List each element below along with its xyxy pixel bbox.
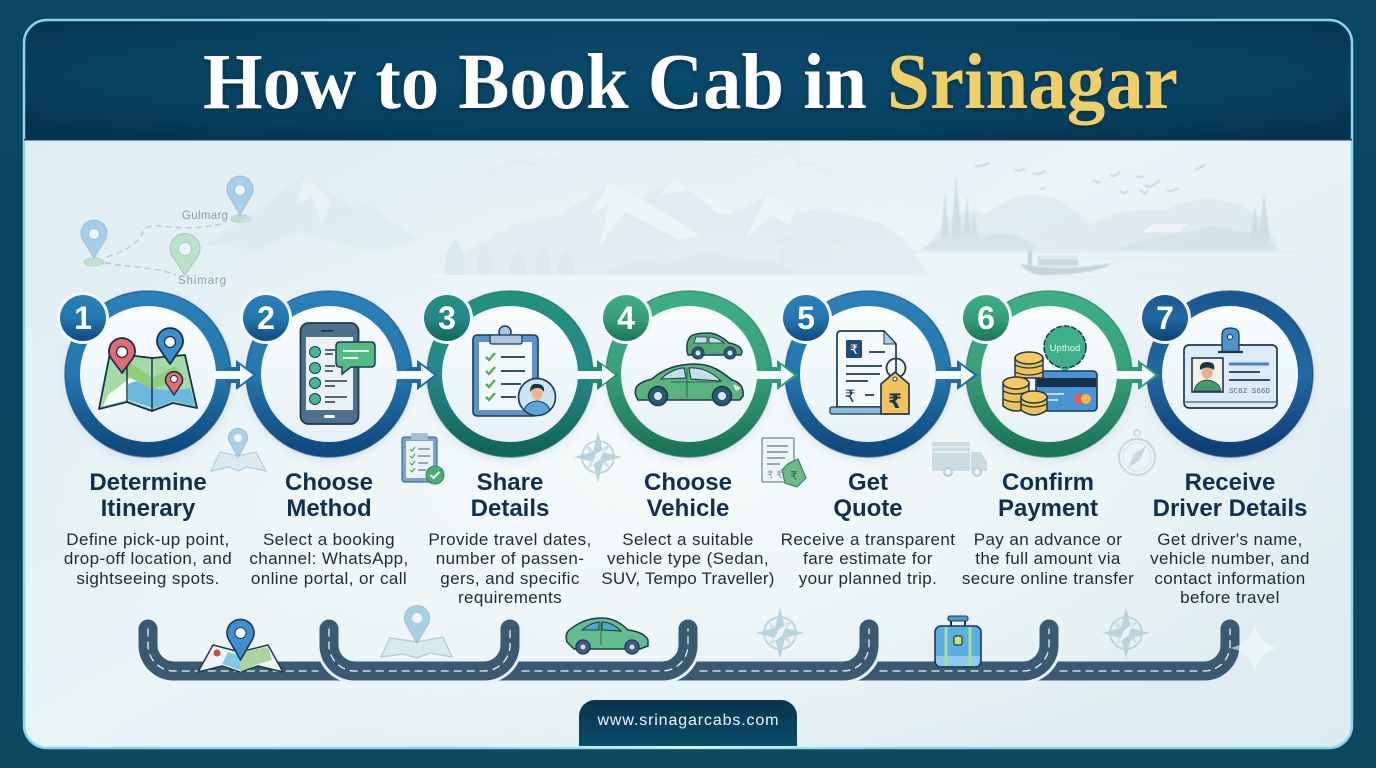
icon: quote document with price tag: ₹ bbox=[850, 343, 858, 358]
header band bbox=[24, 20, 1352, 140]
description 1: sightseeing spots. bbox=[76, 569, 220, 588]
number badge 1 bbox=[57, 292, 109, 344]
ring 7 bbox=[1147, 291, 1313, 459]
background scenery: route map with pins: Shimarg bbox=[178, 275, 226, 287]
faded icon: compass bbox=[1119, 430, 1155, 475]
number badge 2: 2 bbox=[257, 300, 275, 336]
description 2: Select a booking bbox=[263, 530, 395, 549]
arrow 4 to 5 bbox=[756, 360, 798, 390]
road icon: green car bbox=[566, 618, 648, 654]
ring 5 bbox=[785, 291, 951, 459]
heading 7: Receive bbox=[1185, 469, 1275, 496]
small icon: fare document with tag: ₹ bbox=[790, 469, 798, 483]
description 6: the full amount via bbox=[975, 549, 1121, 568]
background scenery: left mountain bbox=[205, 173, 420, 252]
arrow 1 to 2 bbox=[215, 360, 257, 390]
heading 5: Quote bbox=[833, 495, 903, 522]
road icon: compass rose 1 bbox=[756, 607, 804, 659]
ring 2 bbox=[246, 291, 412, 459]
description 5: Receive a transparent bbox=[781, 530, 955, 549]
number badge 4: 4 bbox=[617, 300, 635, 336]
heading 3: Share bbox=[477, 469, 543, 496]
road icon: map with blue pin bbox=[198, 619, 283, 672]
description 3: number of passen- bbox=[436, 549, 584, 568]
step 4 bbox=[600, 291, 775, 588]
ring 4 bbox=[606, 291, 772, 459]
number badge 1: 1 bbox=[74, 300, 92, 336]
faded icon: map with pin bbox=[211, 428, 266, 471]
arrow 2 to 3 bbox=[396, 360, 438, 390]
heading 1: Determine bbox=[89, 469, 207, 496]
arrow 3 to 4 bbox=[577, 360, 618, 390]
background scenery: central mountains bbox=[430, 150, 930, 277]
icon: badge, card and coins bbox=[1003, 326, 1097, 415]
number badge 4 bbox=[600, 292, 652, 344]
background scenery: lake with boat and birds bbox=[910, 163, 1295, 282]
description 6: Pay an advance or bbox=[974, 530, 1122, 549]
description 3: Provide travel dates, bbox=[428, 530, 592, 549]
title: Srinagar bbox=[887, 39, 1178, 126]
background scenery: route map with pins bbox=[81, 176, 253, 287]
description 3: gers, and specific bbox=[440, 569, 580, 588]
footer website tab: www.srinagarcabs.com bbox=[596, 712, 778, 729]
winding road bbox=[148, 629, 1230, 671]
heading 6: Confirm bbox=[1002, 469, 1094, 496]
number badge 6 bbox=[960, 292, 1012, 344]
small icon: clipboard with check bbox=[402, 433, 444, 484]
background scenery: route map with pins: Gulmarg bbox=[182, 210, 228, 222]
icon: badge, card and coins: Upthod bbox=[1050, 343, 1080, 354]
description 2: channel: WhatsApp, bbox=[249, 549, 409, 568]
description 6: secure online transfer bbox=[962, 569, 1134, 588]
icon: driver ID card: SC62 S66D bbox=[1229, 388, 1270, 396]
step 5 bbox=[780, 291, 955, 588]
icon: quote document with price tag bbox=[830, 331, 909, 414]
description 7: Get driver's name, bbox=[1157, 530, 1303, 549]
footer website tab bbox=[579, 700, 797, 746]
ring 3 bbox=[427, 291, 593, 459]
ring 1 bbox=[65, 291, 231, 459]
heading 2: Method bbox=[286, 495, 372, 522]
number badge 5: 5 bbox=[797, 300, 815, 336]
description 3: requirements bbox=[458, 588, 562, 607]
small icon: fare document with tag: ₹ ₹ bbox=[767, 470, 783, 481]
number badge 3 bbox=[421, 292, 473, 344]
description 1: Define pick-up point, bbox=[66, 530, 230, 549]
road icon: suitcase bbox=[935, 616, 981, 667]
faded icon: truck bbox=[932, 442, 987, 476]
description 1: drop-off location, and bbox=[64, 549, 232, 568]
number badge 7 bbox=[1139, 292, 1191, 344]
icon: quote document with price tag: ₹ bbox=[888, 389, 902, 413]
number badge 2 bbox=[240, 292, 292, 344]
description 2: online portal, or call bbox=[251, 569, 407, 588]
icon: SUV bbox=[687, 333, 742, 359]
step 7 bbox=[1139, 291, 1313, 607]
road icon: faded map with pin bbox=[381, 606, 452, 658]
number badge 3: 3 bbox=[438, 300, 456, 336]
step 1 bbox=[57, 291, 232, 588]
number badge 7: 7 bbox=[1156, 300, 1174, 336]
icon: quote document with price tag: ₹ bbox=[845, 387, 855, 407]
heading 7: Driver Details bbox=[1153, 495, 1307, 522]
ring 6 bbox=[966, 291, 1132, 459]
arrow 6 to 7 bbox=[1117, 360, 1159, 390]
icon: driver ID card bbox=[1184, 328, 1277, 408]
heading 3: Details bbox=[471, 495, 549, 522]
icon: folded map with pins bbox=[99, 328, 197, 411]
road icon: compass rose 2 bbox=[1102, 607, 1150, 659]
description 7: vehicle number, and bbox=[1150, 549, 1310, 568]
step 3 bbox=[421, 291, 593, 607]
step 6 bbox=[960, 291, 1134, 588]
heading 6: Payment bbox=[998, 495, 1098, 522]
description 7: contact information bbox=[1154, 569, 1306, 588]
glow line at footer bbox=[480, 746, 896, 748]
icon: clipboard and person bbox=[473, 326, 556, 416]
heading 4: Vehicle bbox=[647, 495, 729, 522]
icon: sedan bbox=[635, 364, 743, 406]
description 5: your planned trip. bbox=[799, 569, 937, 588]
arrow 5 to 6 bbox=[936, 360, 978, 390]
sparkle bbox=[1230, 623, 1279, 672]
title: How to Book Cab in bbox=[203, 39, 867, 126]
description 4: SUV, Tempo Traveller) bbox=[601, 569, 775, 588]
heading 2: Choose bbox=[285, 469, 373, 496]
small icon: fare document with tag bbox=[762, 438, 806, 487]
heading 1: Itinerary bbox=[101, 495, 196, 522]
description 4: vehicle type (Sedan, bbox=[607, 549, 769, 568]
faded icon: compass rose bbox=[574, 431, 622, 483]
number badge 5 bbox=[780, 292, 832, 344]
description 7: before travel bbox=[1180, 588, 1280, 607]
description 5: fare estimate for bbox=[803, 549, 933, 568]
heading 5: Get bbox=[848, 469, 888, 496]
number badge 6: 6 bbox=[977, 300, 995, 336]
icon: phone with chat bbox=[300, 323, 375, 424]
description 4: Select a suitable bbox=[622, 530, 754, 549]
heading 4: Choose bbox=[644, 469, 732, 496]
step 2 bbox=[240, 291, 412, 588]
